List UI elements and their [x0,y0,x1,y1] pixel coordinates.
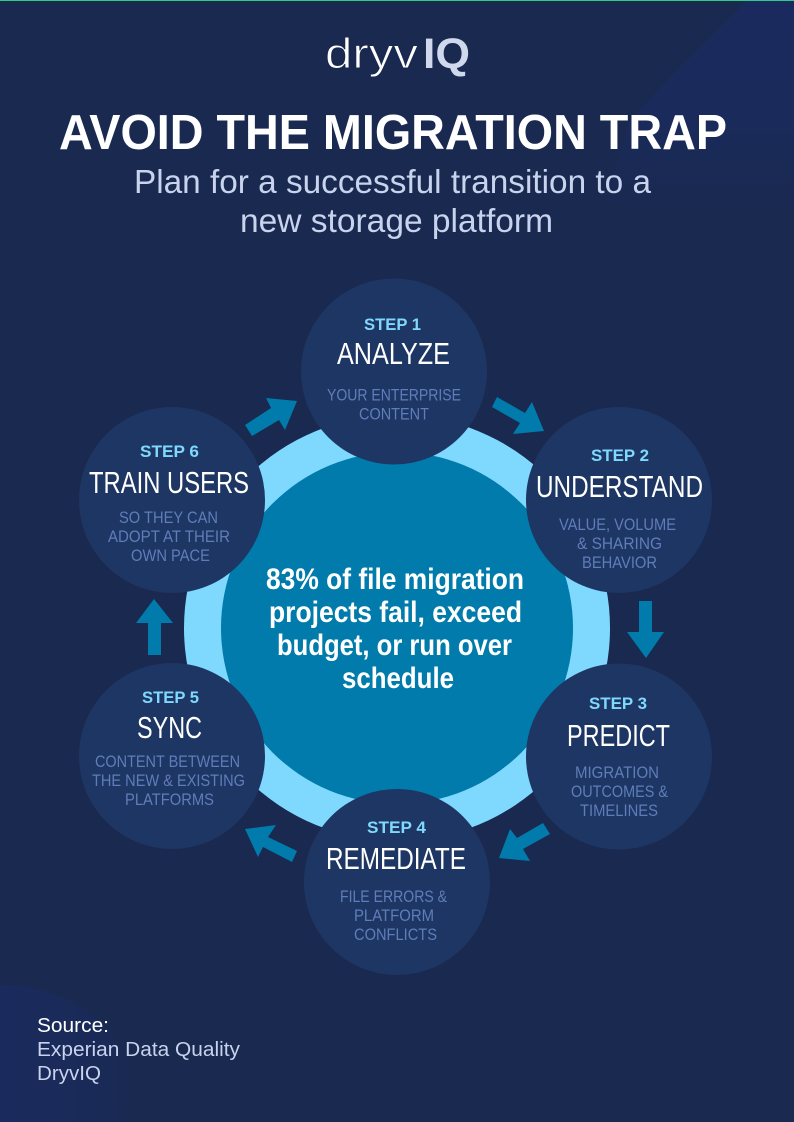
step 5: sync: STEP 5 [142,688,199,707]
step 1: analyze: ANALYZE [337,336,450,371]
arrow: step 1 to step 2 [492,397,544,434]
step 3: predict: STEP 3 [589,694,647,713]
subtitle [134,163,652,239]
arrow: step 3 to step 4 [499,823,550,861]
arrow: step 5 to step 6 [136,599,173,655]
logo: dryvIQ: dryv [325,30,419,78]
step 4: remediate: PLATFORM [354,906,434,925]
step 5: sync: PLATFORMS [125,790,214,809]
center circle with statistic: budget, or run over [277,629,512,662]
source note: DryvIQ [37,1063,101,1085]
center circle with statistic: projects fail, exceed [269,596,522,629]
step 2: understand: STEP 2 [591,446,649,465]
center circle with statistic: 83% of file migration [266,563,524,596]
step 3: predict: TIMELINES [580,801,658,820]
step 1: analyze: CONTENT [359,404,429,424]
arrow: step 6 to step 1 [245,398,297,436]
arrow: step 4 to step 5 [245,825,297,862]
step 6: train users [79,407,265,593]
center circle with statistic: schedule [342,662,454,695]
step 6: train users: OWN PACE [131,546,210,565]
source note: Experian Data Quality [37,1039,240,1061]
step 3: predict: PREDICT [567,718,670,753]
step 3: predict: MIGRATION [575,763,659,782]
subtitle: Plan for a successful transition to a [134,163,652,200]
step 3: predict [526,664,712,850]
step 5: sync: CONTENT BETWEEN [95,752,240,771]
title: AVOID THE MIGRATION TRAP [59,106,727,160]
step 6: train users: ADOPT AT THEIR [108,527,230,546]
step 4: remediate: CONFLICTS [354,925,437,944]
step 2: understand: UNDERSTAND [536,469,703,504]
step 6: train users: SO THEY CAN [119,508,218,527]
step 2: understand [526,407,712,593]
step 1: analyze: STEP 1 [364,315,421,334]
step 5: sync: SYNC [137,710,202,745]
center ring [184,415,610,841]
step 5: sync [79,663,265,849]
center circle with statistic [221,452,573,804]
step 4: remediate [304,789,490,975]
step 4: remediate: FILE ERRORS & [340,887,448,906]
step 1: analyze: YOUR ENTERPRISE [327,386,461,404]
subtitle: new storage platform [240,202,553,239]
arrow: step 2 to step 3 [627,601,664,658]
step 3: predict: OUTCOMES & [571,782,669,801]
step 6: train users: TRAIN USERS [89,465,249,500]
step 6: train users: STEP 6 [140,442,199,461]
step 2: understand: BEHAVIOR [582,553,657,572]
step 2: understand: & SHARING [577,534,662,553]
step 4: remediate: STEP 4 [367,818,427,837]
source note: Source: [37,1015,109,1037]
source note [37,1015,240,1085]
logo: dryvIQ: IQ [423,30,470,78]
step 5: sync: THE NEW & EXISTING [92,771,245,790]
step 4: remediate: REMEDIATE [326,841,466,876]
step 2: understand: VALUE, VOLUME [559,515,676,534]
logo: dryvIQ [325,30,470,78]
step 1: analyze [301,278,487,464]
